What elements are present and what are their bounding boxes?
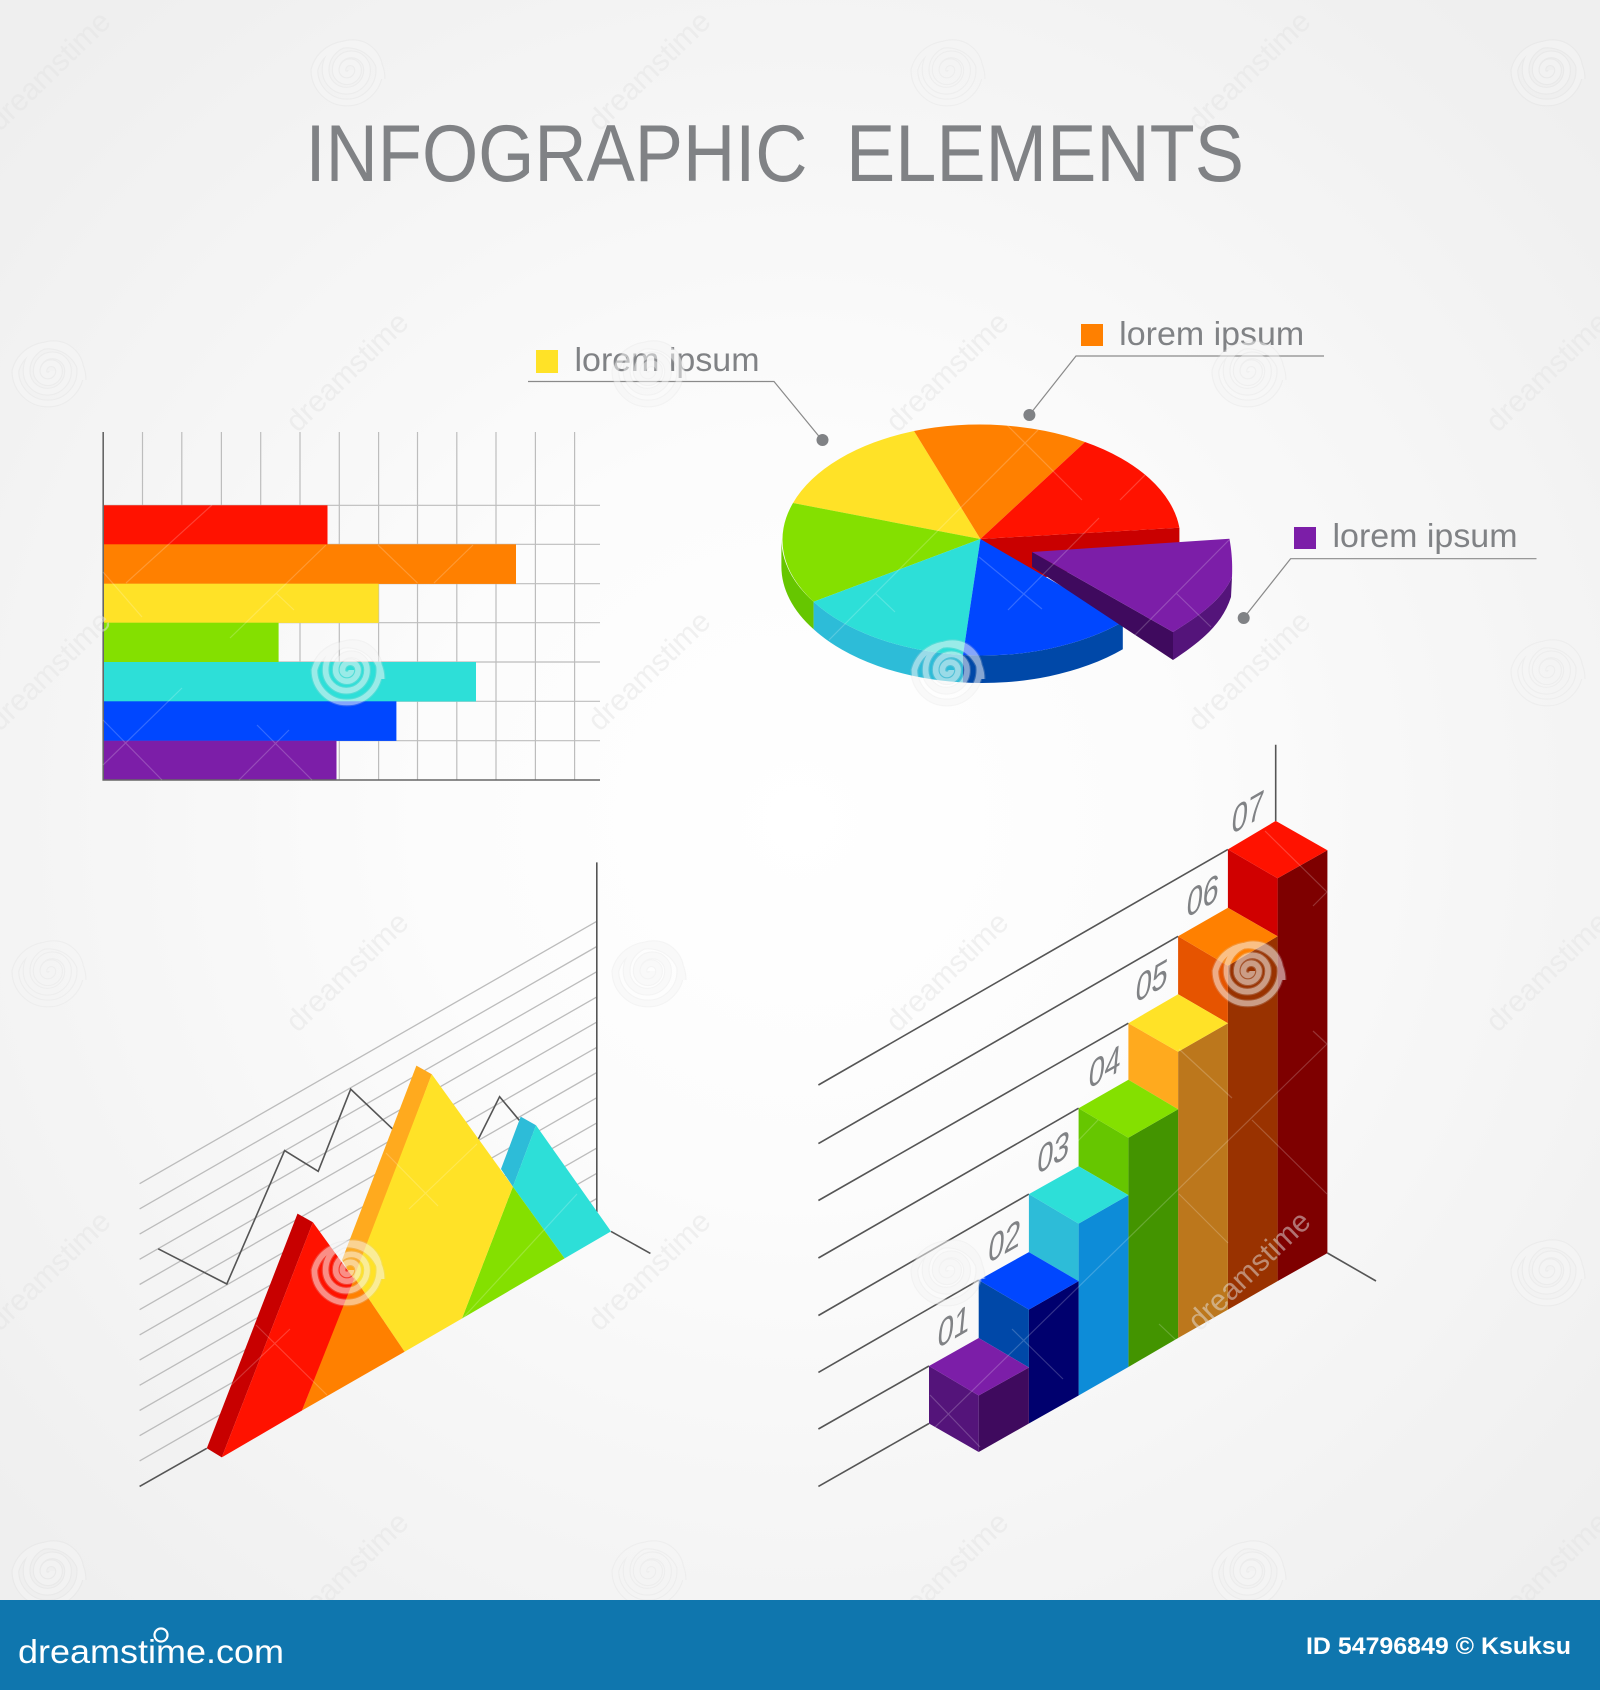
callout: orange [1023, 315, 1324, 421]
footer bar [0, 1600, 1600, 1690]
column 06 orange [1178, 908, 1278, 1310]
column 05 yellow [1128, 994, 1228, 1338]
column 07 red [1228, 821, 1327, 1281]
column number labels: 01 [936, 1295, 972, 1358]
watermark layer: dreamstime [1182, 5, 1317, 137]
callout: yellow [528, 341, 828, 446]
title [306, 109, 1244, 199]
watermark layer: dreamstime [280, 906, 415, 1038]
watermark layer: dreamstime [582, 1205, 717, 1337]
chart axes [103, 432, 600, 780]
column 02 blue [979, 1252, 1079, 1424]
panel: exploded pie chart [528, 315, 1536, 683]
chart grid [140, 921, 597, 1461]
chart axes [140, 862, 650, 1486]
pie slices [782, 425, 1179, 656]
watermark layer: dreamstime [880, 1506, 1015, 1638]
column 01 purple [929, 1338, 1029, 1452]
column number labels: 05 [1134, 949, 1170, 1012]
column 03 teal [1029, 1166, 1128, 1396]
title: ELEMENTS [846, 109, 1244, 199]
column number labels: 07 [1230, 781, 1266, 844]
watermark layer: dreamstime [280, 306, 415, 438]
column number labels: 03 [1035, 1121, 1072, 1184]
column number labels: 04 [1087, 1035, 1123, 1098]
column number labels: 02 [986, 1210, 1023, 1273]
panel: horizontal bar chart [103, 432, 600, 780]
chart grid [103, 432, 600, 780]
mountain areas [207, 1066, 611, 1457]
watermark layer: dreamstime [880, 306, 1015, 438]
watermark layer: dreamstime [880, 906, 1015, 1038]
column number labels [936, 781, 1266, 1358]
callout: yellow: lorem ipsum [574, 341, 760, 378]
line series [158, 1089, 519, 1284]
exploded purple slice [1032, 539, 1232, 660]
footer credit: ID 54796849 © Ksuksu [1306, 1633, 1571, 1660]
callout: orange: lorem ipsum [1119, 315, 1304, 352]
watermark layer: dreamstime [582, 605, 717, 737]
callout: purple: lorem ipsum [1332, 517, 1518, 554]
callout: purple [1238, 517, 1536, 624]
watermark layer: dreamstime [280, 1506, 415, 1638]
column 04 green [1079, 1080, 1178, 1367]
watermark layer: dreamstime [582, 5, 717, 137]
watermark layer: dreamstime [1182, 605, 1317, 737]
title: INFOGRAPHIC [306, 109, 808, 199]
pie side faces [781, 528, 1179, 683]
bars [103, 505, 516, 780]
panel: isometric stepped bar chart [818, 745, 1376, 1486]
footer logo: dreamstime.com [18, 1633, 284, 1670]
column number labels: 06 [1185, 864, 1221, 927]
watermark layer: dreamstime [1182, 1205, 1317, 1337]
chart guide lines [818, 745, 1376, 1486]
panel: isometric mountain chart [140, 862, 650, 1486]
